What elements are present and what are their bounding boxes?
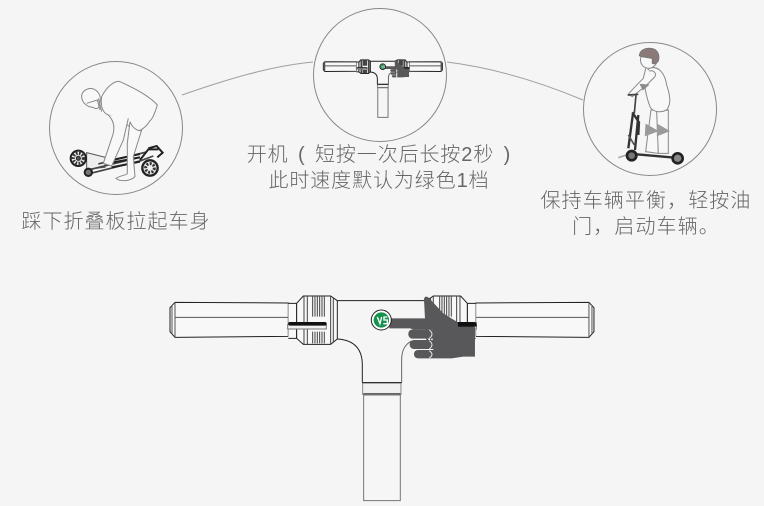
- connector curve: left to centre: [182, 62, 313, 95]
- connector curve: centre to right: [447, 62, 583, 100]
- text: step two caption: [247, 144, 511, 192]
- text: step two caption: 此时速度默认为绿色1档: [268, 170, 490, 192]
- text: step one caption: 踩下折叠板拉起车身: [22, 211, 210, 233]
- illustration: person unfolding scooter: [71, 81, 163, 181]
- text: step three caption: 门，启动车辆。: [572, 216, 720, 238]
- main illustration: handlebar with hand pressing power button: [170, 296, 594, 501]
- illustration: small handlebar with hand: [323, 60, 442, 117]
- illustration: child riding scooter: [618, 48, 683, 163]
- panel: unfold step circle: [50, 62, 182, 194]
- panel: power on step circle: [314, 8, 446, 142]
- text: step three caption: 保持车辆平衡，轻按油: [540, 190, 752, 212]
- text: step two caption: 开机 ( 短按一次后长按2秒 ): [247, 144, 511, 166]
- panel: ride step circle: [584, 42, 716, 176]
- text: step three caption: [540, 190, 752, 238]
